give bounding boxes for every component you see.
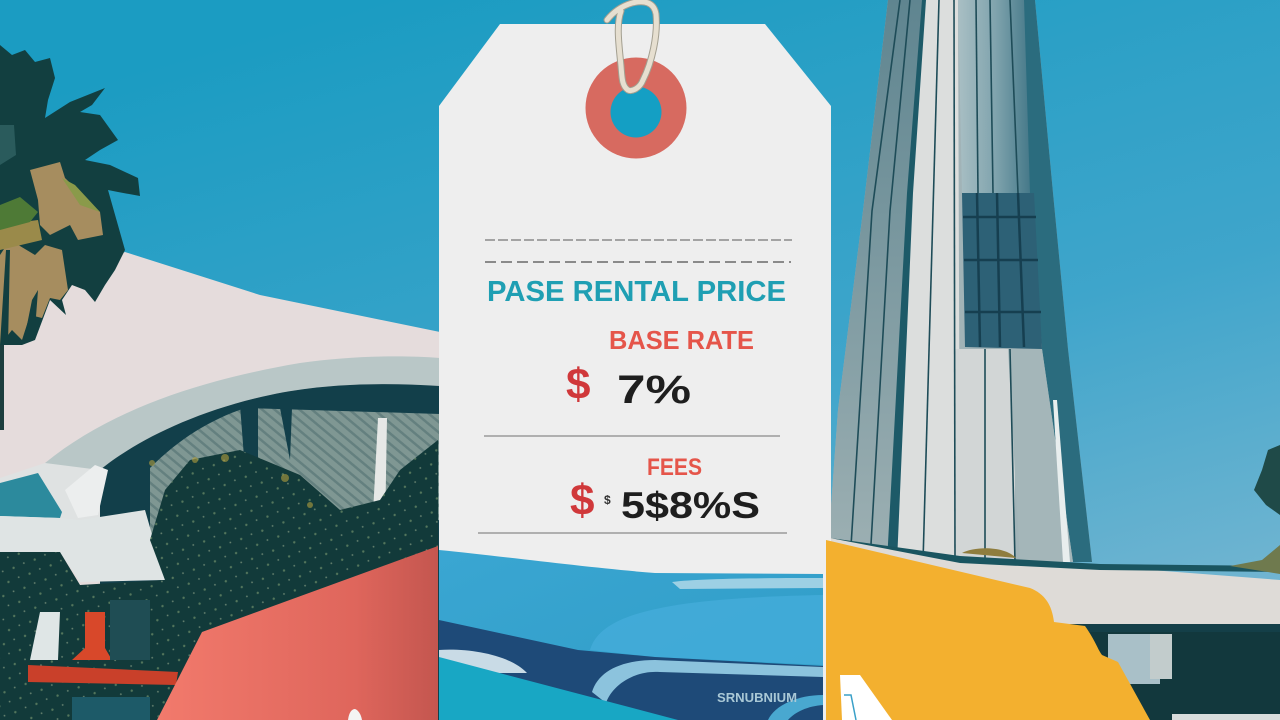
- building: curved white roof on the left: [0, 252, 440, 720]
- label: fees: FEES: [647, 454, 702, 481]
- palm fronds dark: [0, 45, 140, 345]
- divider: [478, 532, 787, 534]
- panel: coral fold: [157, 546, 438, 720]
- label: base rate: BASE RATE: [609, 325, 754, 355]
- tower: [827, 0, 1092, 562]
- panel: blue car illustration: SRNUBNIUM: [717, 690, 797, 705]
- palm green patch: [0, 197, 38, 230]
- panel: blue car illustration: [439, 550, 823, 720]
- walkway and right-side ground: [830, 445, 1280, 720]
- value: fees amount: 5$8%S: [621, 485, 760, 526]
- red structure among the trees: [28, 600, 178, 720]
- building: lower white block and teal glass: [0, 463, 165, 582]
- palm tree: [0, 45, 140, 430]
- panel: teal corner: [439, 657, 678, 720]
- trees on the left: [0, 440, 438, 720]
- price tag card: [439, 24, 831, 720]
- panel: yellow fold: [826, 540, 1150, 720]
- value: base rate amount: [566, 360, 691, 412]
- palm dead fronds: [0, 240, 68, 345]
- string loop: [607, 2, 656, 91]
- value: fees amount: $: [570, 476, 594, 525]
- value: base rate amount: 7%: [617, 368, 691, 412]
- divider: [484, 435, 780, 437]
- value: fees amount: $: [604, 493, 611, 507]
- tag eyelet: [586, 58, 686, 158]
- dashed perforation lines: [485, 240, 792, 262]
- heading: rental price: PASE RENTAL PRICE: [487, 276, 786, 308]
- value: base rate amount: $: [566, 360, 590, 409]
- value: fees amount: [570, 476, 760, 526]
